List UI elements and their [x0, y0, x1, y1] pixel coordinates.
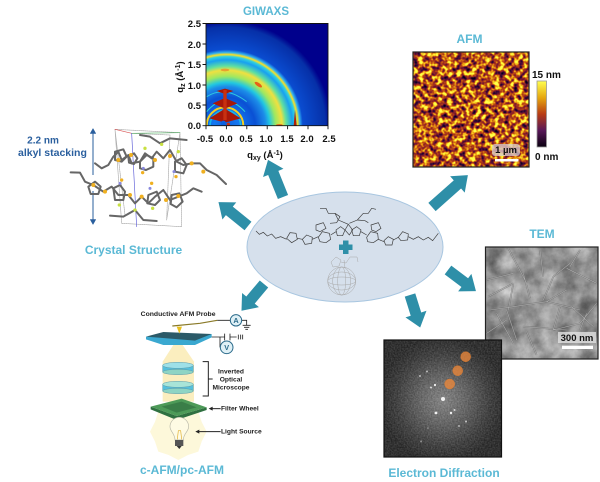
scale bar: 1 µm: [492, 144, 520, 162]
heading: c-AFM/pc-AFM: c-AFM/pc-AFM: [140, 463, 224, 477]
light source pointer: [195, 430, 221, 434]
panel: TEM: [486, 227, 598, 359]
microscope label: Microscope: [212, 385, 250, 392]
circuit wires: [212, 320, 251, 347]
x axis tick labels: 0.5: [239, 134, 253, 145]
colour bar max label: 15 nm: [532, 70, 561, 81]
x axis title: q: [247, 150, 253, 161]
x axis title: (Å: [261, 150, 274, 161]
arrow: to crystal structure: [212, 194, 255, 235]
unit cell box: [115, 129, 182, 227]
panel: GIWAXS: [175, 6, 336, 162]
y axis tick labels: 2.0: [188, 40, 201, 51]
donor polymer molecule: [256, 208, 438, 245]
x axis tick labels: 1.5: [280, 134, 294, 145]
sample stage: [146, 332, 212, 345]
scale bar: 1 µm: 1 µm: [495, 145, 517, 156]
y axis tick labels: 2.5: [188, 19, 202, 30]
microscope label: Optical: [220, 376, 242, 383]
nanofibre network: [487, 248, 597, 355]
stacking double arrow: [90, 128, 96, 224]
x axis tick labels: 2.0: [300, 134, 314, 145]
heading: crystal structure: Crystal Structure: [85, 243, 183, 257]
arrow: to electron diffraction: [400, 292, 431, 331]
ammeter: [230, 315, 242, 326]
filter wheel label: Filter Wheel: [221, 406, 259, 413]
diffraction spots: [419, 370, 467, 442]
ellipse background: [247, 192, 443, 302]
arrow: to GIWAXS: [258, 156, 293, 201]
orange highlighted spots: [445, 352, 471, 389]
crystal molecules: [71, 129, 226, 227]
x axis tick labels: -0.5: [197, 134, 214, 145]
unit cell axes: [115, 129, 132, 133]
AFM height map: [413, 52, 529, 167]
stacking label line 2: alkyl stacking: [18, 147, 87, 159]
x axis title: -1: [273, 150, 280, 157]
x axis tick labels: [197, 134, 336, 145]
microscope label: Inverted: [218, 368, 244, 375]
y axis title: z: [180, 83, 187, 87]
scattering pattern: [206, 24, 328, 126]
light cone: [163, 345, 194, 402]
ammeter: A: [233, 316, 239, 325]
x axis tick labels: 1.0: [259, 134, 273, 145]
y axis title: q: [175, 87, 186, 93]
panel: c-AFM setup: [141, 311, 262, 460]
panel: electron diffraction: [384, 340, 502, 457]
arrow: to AFM: [425, 167, 475, 215]
voltmeter: V: [224, 343, 229, 352]
y axis title: ): [175, 61, 186, 64]
filter wheel pointer: [209, 407, 221, 411]
TEM scale bar: [558, 332, 596, 349]
light bulb: [170, 417, 189, 449]
x axis title: ): [280, 150, 283, 161]
TEM micrograph: [486, 247, 598, 359]
heading: AFM: AFM: [456, 32, 482, 46]
TEM scale bar: 300 nm: [561, 333, 593, 344]
y axis tick labels: 0.5: [188, 101, 202, 112]
heteroatoms: [91, 143, 205, 212]
AFM frame: [413, 52, 529, 167]
light source label: Light Source: [221, 429, 262, 436]
y axis tick labels: [188, 19, 202, 132]
x axis tick labels: 2.5: [322, 134, 336, 145]
x axis tick labels: 0.0: [219, 134, 233, 145]
light glow: [150, 403, 207, 460]
voltmeter: [220, 341, 233, 354]
arrow: to c-AFM: [233, 277, 272, 318]
diffraction frame: [384, 340, 502, 457]
heading: GIWAXS: GIWAXS: [243, 6, 289, 18]
plus sign: [339, 240, 352, 254]
y axis title: -1: [175, 64, 182, 71]
probe label: Conductive AFM Probe: [141, 311, 216, 318]
diffraction background: [384, 340, 502, 457]
heading: TEM: TEM: [529, 227, 555, 241]
panel: AFM: [413, 32, 561, 167]
plot frame and ticks: [202, 24, 328, 129]
AFM probe: [172, 320, 217, 334]
TEM frame: [486, 247, 598, 359]
diffraction noise: [384, 340, 502, 457]
y axis title: (Å: [175, 71, 186, 83]
x axis title: xy: [253, 155, 261, 162]
heading: electron diffraction: Electron Diffraction: [388, 466, 500, 480]
molecule sticks: [71, 135, 226, 221]
stacking label: 2.2 nm: [27, 136, 59, 146]
microscope bracket: [203, 362, 213, 396]
lens stack: [163, 362, 193, 394]
panel: crystal structure: [18, 128, 226, 257]
arrow: to TEM: [441, 261, 483, 300]
filter wheel: [151, 399, 207, 420]
y axis tick labels: 1.0: [188, 81, 201, 92]
y axis tick labels: 0.0: [188, 121, 201, 132]
y axis tick labels: 1.5: [188, 60, 202, 71]
colour bar: [537, 81, 546, 147]
microscope label: [212, 368, 250, 392]
panel: central blend ellipse: [247, 192, 443, 302]
fullerene acceptor molecule: [328, 257, 358, 295]
colour bar min label: 0 nm: [535, 152, 558, 163]
